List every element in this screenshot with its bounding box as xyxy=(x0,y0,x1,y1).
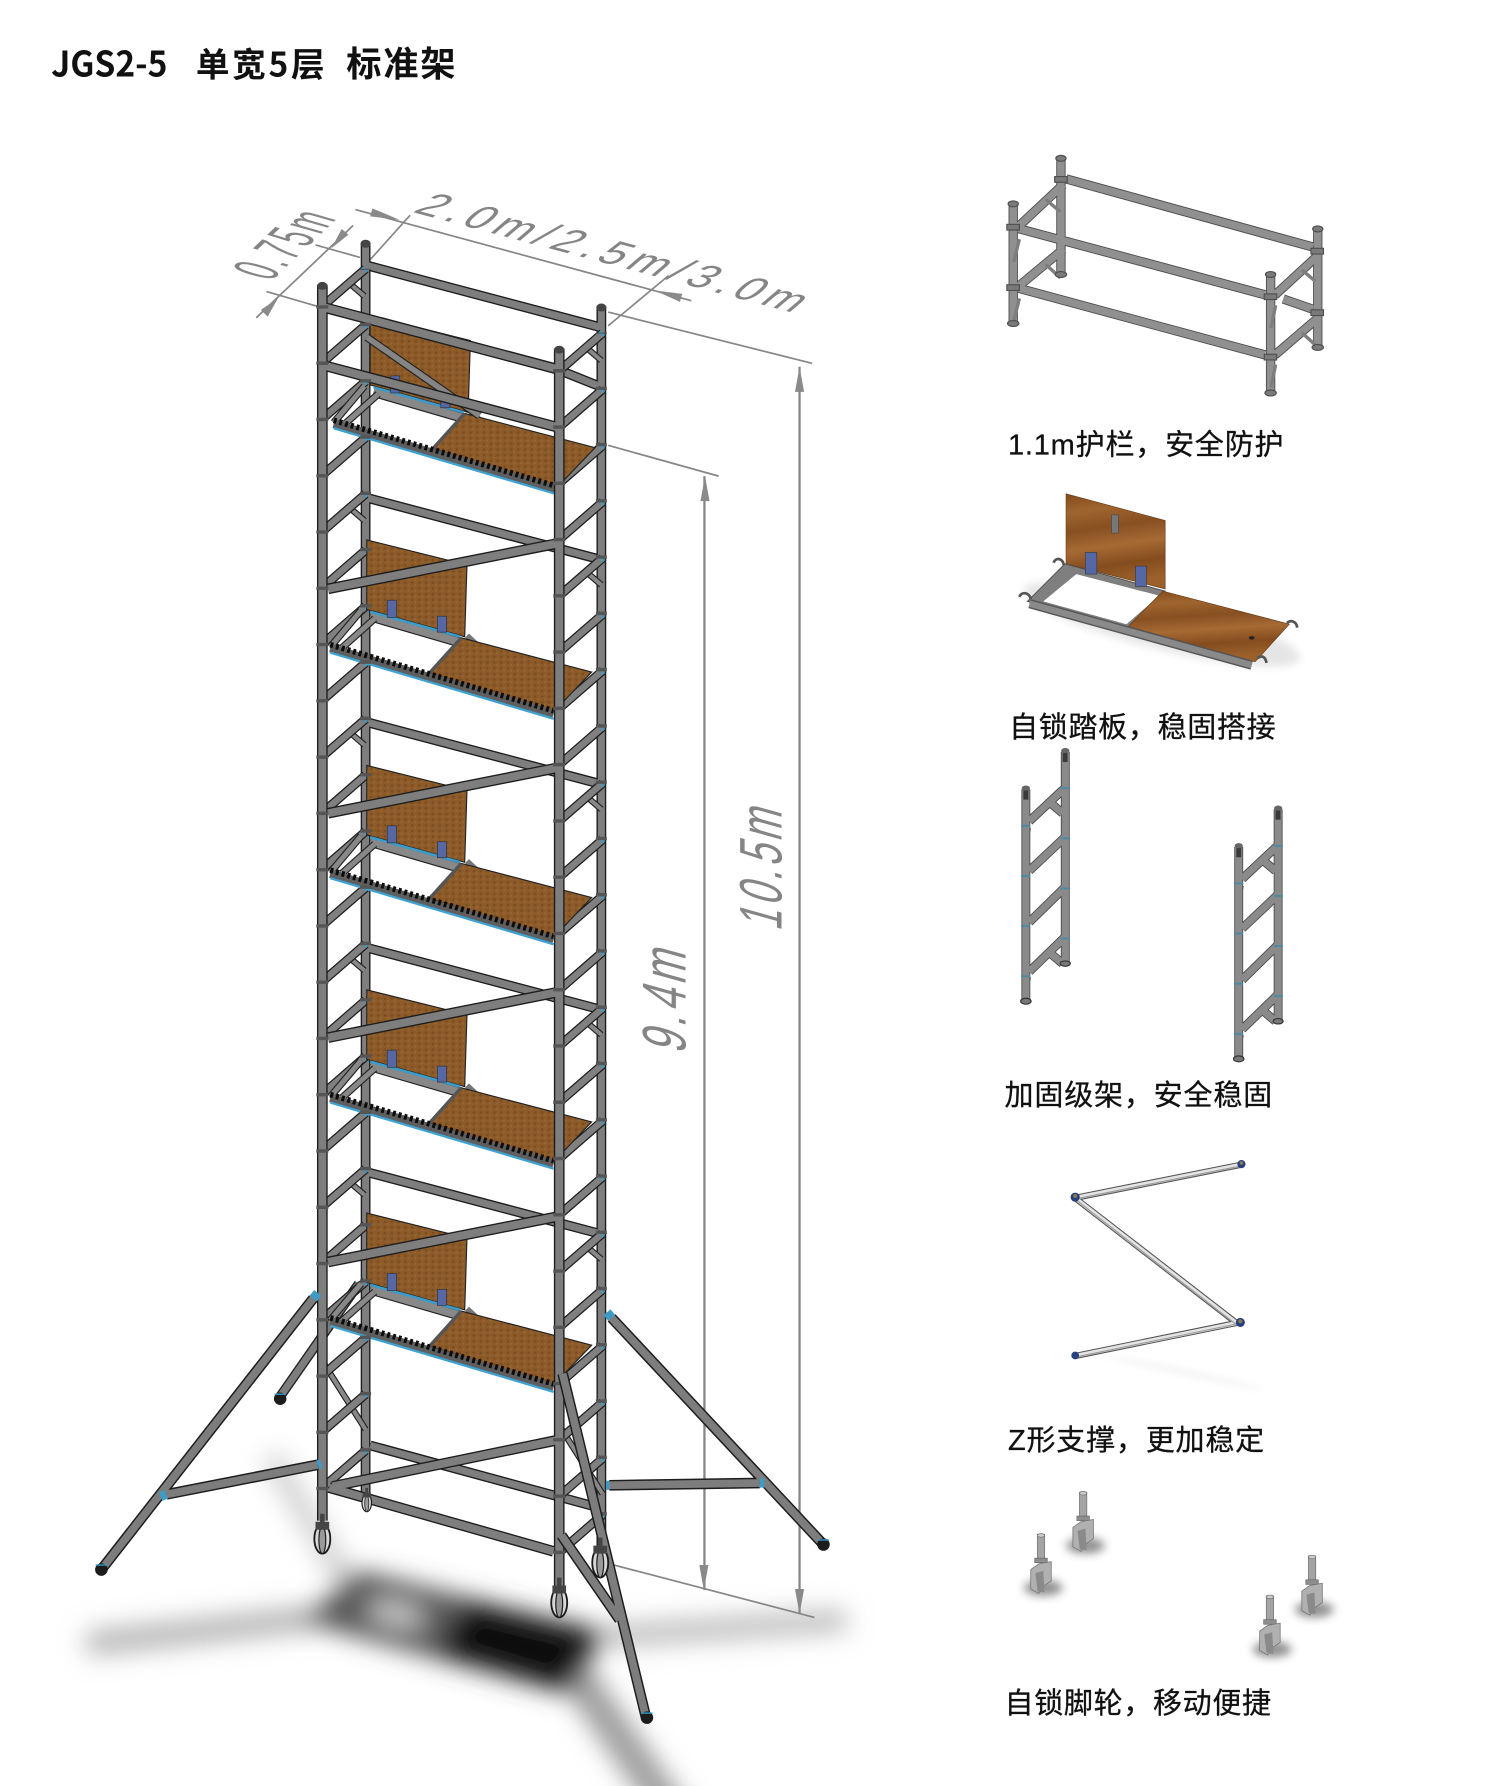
caption: Z brace: Z形支撑，更加稳定 xyxy=(1008,1424,1264,1457)
rear posts, rails and ladder rungs xyxy=(322,243,603,1560)
detail: Z brace xyxy=(1071,1160,1263,1392)
title xyxy=(51,36,456,87)
internal brace on top level xyxy=(367,337,479,416)
ground shadow xyxy=(97,1464,837,1786)
scaffold tower xyxy=(95,240,830,1724)
tower castors xyxy=(314,1488,608,1617)
platform level 5 xyxy=(330,1213,592,1392)
outrigger: rear left xyxy=(280,1284,359,1396)
dimension label: 10.5m: 10.5m xyxy=(726,796,794,935)
caption: guard rail: 1.1m护栏，安全防护 xyxy=(1008,428,1284,461)
outriggers: left, right and front with struts xyxy=(101,1293,822,1717)
detail: self-locking platform xyxy=(1018,494,1306,683)
detail: locking castors xyxy=(1024,1491,1334,1657)
detail: reinforced ladder frames xyxy=(1021,748,1283,1062)
dimension label: 9.4m: 9.4m xyxy=(631,937,700,1059)
outrigger feet xyxy=(95,1392,830,1724)
front posts, guard rails and diagonal braces xyxy=(317,240,606,1589)
title: 单宽5层 xyxy=(196,37,325,86)
platform level 1 (top) with toe board xyxy=(334,316,595,494)
title: JGS2-5 xyxy=(51,36,167,87)
dimension label: 0.75m: 0.75m xyxy=(219,204,351,285)
caption: ladder frames: 加固级架，安全稳固 xyxy=(1005,1079,1272,1112)
guard rail clamps and post ends xyxy=(1007,155,1323,396)
platform level 3 xyxy=(330,765,592,944)
platform level 4 xyxy=(330,990,592,1169)
guard rail gussets xyxy=(1014,199,1315,387)
detail: guard rail frame xyxy=(1007,155,1323,396)
caption: castors: 自锁脚轮，移动便捷 xyxy=(1005,1687,1271,1720)
dimension label: 2.0m/2.5m/3.0m: 2.0m/2.5m/3.0m xyxy=(404,187,822,319)
platform level 2 xyxy=(330,540,592,719)
dimension arrowheads xyxy=(261,208,804,1614)
title: 标准架 xyxy=(346,36,456,87)
dimension: depth, width and height lines xyxy=(256,210,814,1617)
caption: platform: 自锁踏板，稳固搭接 xyxy=(1009,711,1276,744)
